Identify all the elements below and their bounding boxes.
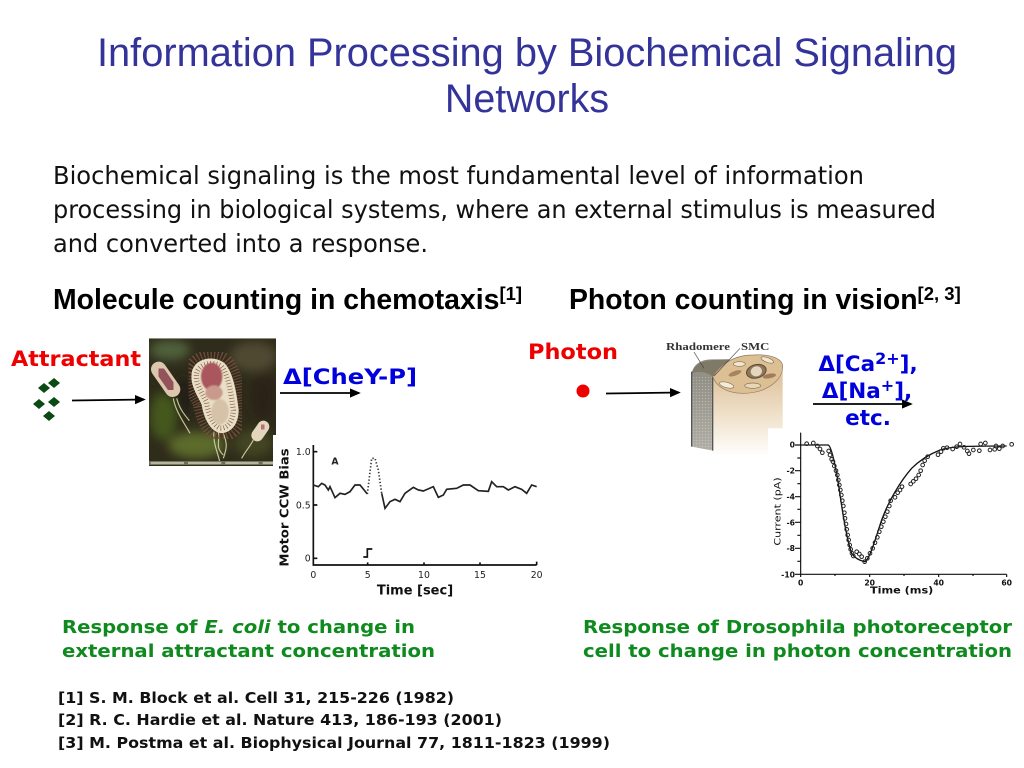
caption: E. coli response: [62, 617, 435, 662]
heading: vision: [2, 3]: [918, 283, 961, 304]
caption: E. coli response: Response of E. coli to change in: [62, 617, 415, 638]
label: ion concentration changes: 2+: [875, 349, 900, 368]
y tick labels: -4: [786, 492, 795, 501]
caption strip: [149, 461, 276, 465]
x labels: 0: [310, 570, 316, 581]
x tick labels: [798, 579, 1012, 588]
x tick labels: 60: [1001, 579, 1012, 588]
caption: E. coli response: external attractant concentration: [62, 641, 435, 662]
label: ion concentration changes: [818, 349, 918, 431]
label: ion concentration changes: ],: [900, 352, 918, 377]
x tick labels: 20: [864, 579, 875, 588]
heading: chemotaxis: Molecule counting in chemotaxis: [53, 284, 499, 316]
panel letter: A: [331, 457, 339, 468]
references: [2] R. C. Hardie et al. Nature 413, 186-193 (2001): [58, 711, 502, 729]
stimulus step: [363, 549, 372, 557]
intro text block: and converted into a response.: [53, 229, 428, 258]
leader lines: [694, 348, 740, 376]
small bacterium right: [257, 427, 263, 435]
x labels: 10: [418, 570, 430, 581]
label: Rhadomere: Rhadomere: [666, 342, 731, 353]
data points: [805, 441, 1013, 563]
intro text block: processing in biological systems, where an external stimulus is measured: [53, 195, 936, 224]
heading: vision: Photon counting in vision: [569, 284, 918, 316]
y labels: [296, 447, 311, 565]
intro text block: [53, 161, 936, 258]
label: photon: Photon: [528, 340, 618, 364]
caption: Drosophila response: Response of Drosophila photoreceptor: [583, 617, 1012, 638]
icon: attractant molecules: [33, 378, 60, 421]
x axis title: Time (ms): [870, 585, 933, 596]
arrow: photoreceptor to ions: [813, 403, 911, 405]
x axis title: Time [sec]: [377, 584, 453, 599]
cell body: [713, 370, 783, 455]
label: CheY-P change: Δ[CheY-P]: [283, 365, 417, 389]
caption: Drosophila response: cell to change in photon concentration: [583, 641, 1012, 662]
y tick labels: -2: [786, 467, 795, 476]
fit curve: [801, 445, 1007, 562]
axes: [795, 433, 1007, 577]
label: ion concentration changes: Δ[Ca: [818, 352, 875, 377]
x tick labels: 40: [933, 579, 944, 588]
image: E. coli bacteria: [147, 338, 277, 466]
large bacterium spines: [193, 360, 237, 432]
arrow: bacteria to CheY-P: [280, 392, 359, 394]
label: ion concentration changes: etc.: [845, 406, 891, 431]
intro text block: Biochemical signaling is the most fundamental level of information: [53, 161, 864, 190]
title: Information Processing by Biochemical Signaling: [97, 31, 957, 75]
y axis title: Motor CCW Bias: [278, 448, 292, 567]
caption: Drosophila response: [583, 617, 1012, 662]
image: photoreceptor cell: [666, 342, 783, 455]
arrow: photon to photoreceptor: [606, 392, 679, 394]
chart: photoreceptor current response: [768, 428, 1021, 597]
references: [3] M. Postma et al. Biophysical Journal 77, 1811-1823 (1999): [58, 734, 610, 752]
y labels: 1.0: [296, 447, 311, 458]
y labels: 0.5: [296, 500, 311, 511]
rhabdomere side: [692, 359, 730, 451]
y tick labels: [781, 441, 795, 579]
y tick labels: -8: [786, 544, 795, 553]
label: SMC: SMC: [741, 342, 769, 353]
y axis title: Current (pA): [774, 477, 784, 546]
y tick labels: -10: [781, 570, 795, 579]
y tick labels: -6: [786, 518, 795, 527]
large bacterium body: [191, 358, 239, 433]
label: ion concentration changes: Δ[Na: [822, 379, 881, 404]
icon: photon dot: [576, 384, 590, 398]
cell top: [713, 355, 783, 393]
bias trace: [313, 483, 367, 498]
x tick labels: 0: [798, 579, 803, 588]
arrow: attractant to bacteria: [72, 400, 144, 401]
y labels: 0: [305, 554, 311, 565]
y tick labels: 0: [790, 441, 795, 450]
flagella: [173, 398, 253, 463]
label: ion concentration changes: ],: [894, 379, 912, 404]
label: attractant: Attractant: [11, 347, 141, 371]
x labels: 5: [365, 570, 371, 581]
x labels: 20: [531, 570, 543, 581]
title: Networks: [445, 77, 609, 121]
heading: chemotaxis: [1]: [499, 283, 522, 304]
small bacterium left: [159, 369, 173, 389]
references: [1] S. M. Block et al. Cell 31, 215-226 (1982): [58, 689, 454, 707]
label: ion concentration changes: +: [881, 376, 894, 395]
chart: motor CCW bias response: [273, 435, 543, 602]
references: [58, 689, 610, 752]
x labels: [310, 570, 543, 581]
axes: [313, 445, 537, 565]
x labels: 15: [474, 570, 486, 581]
